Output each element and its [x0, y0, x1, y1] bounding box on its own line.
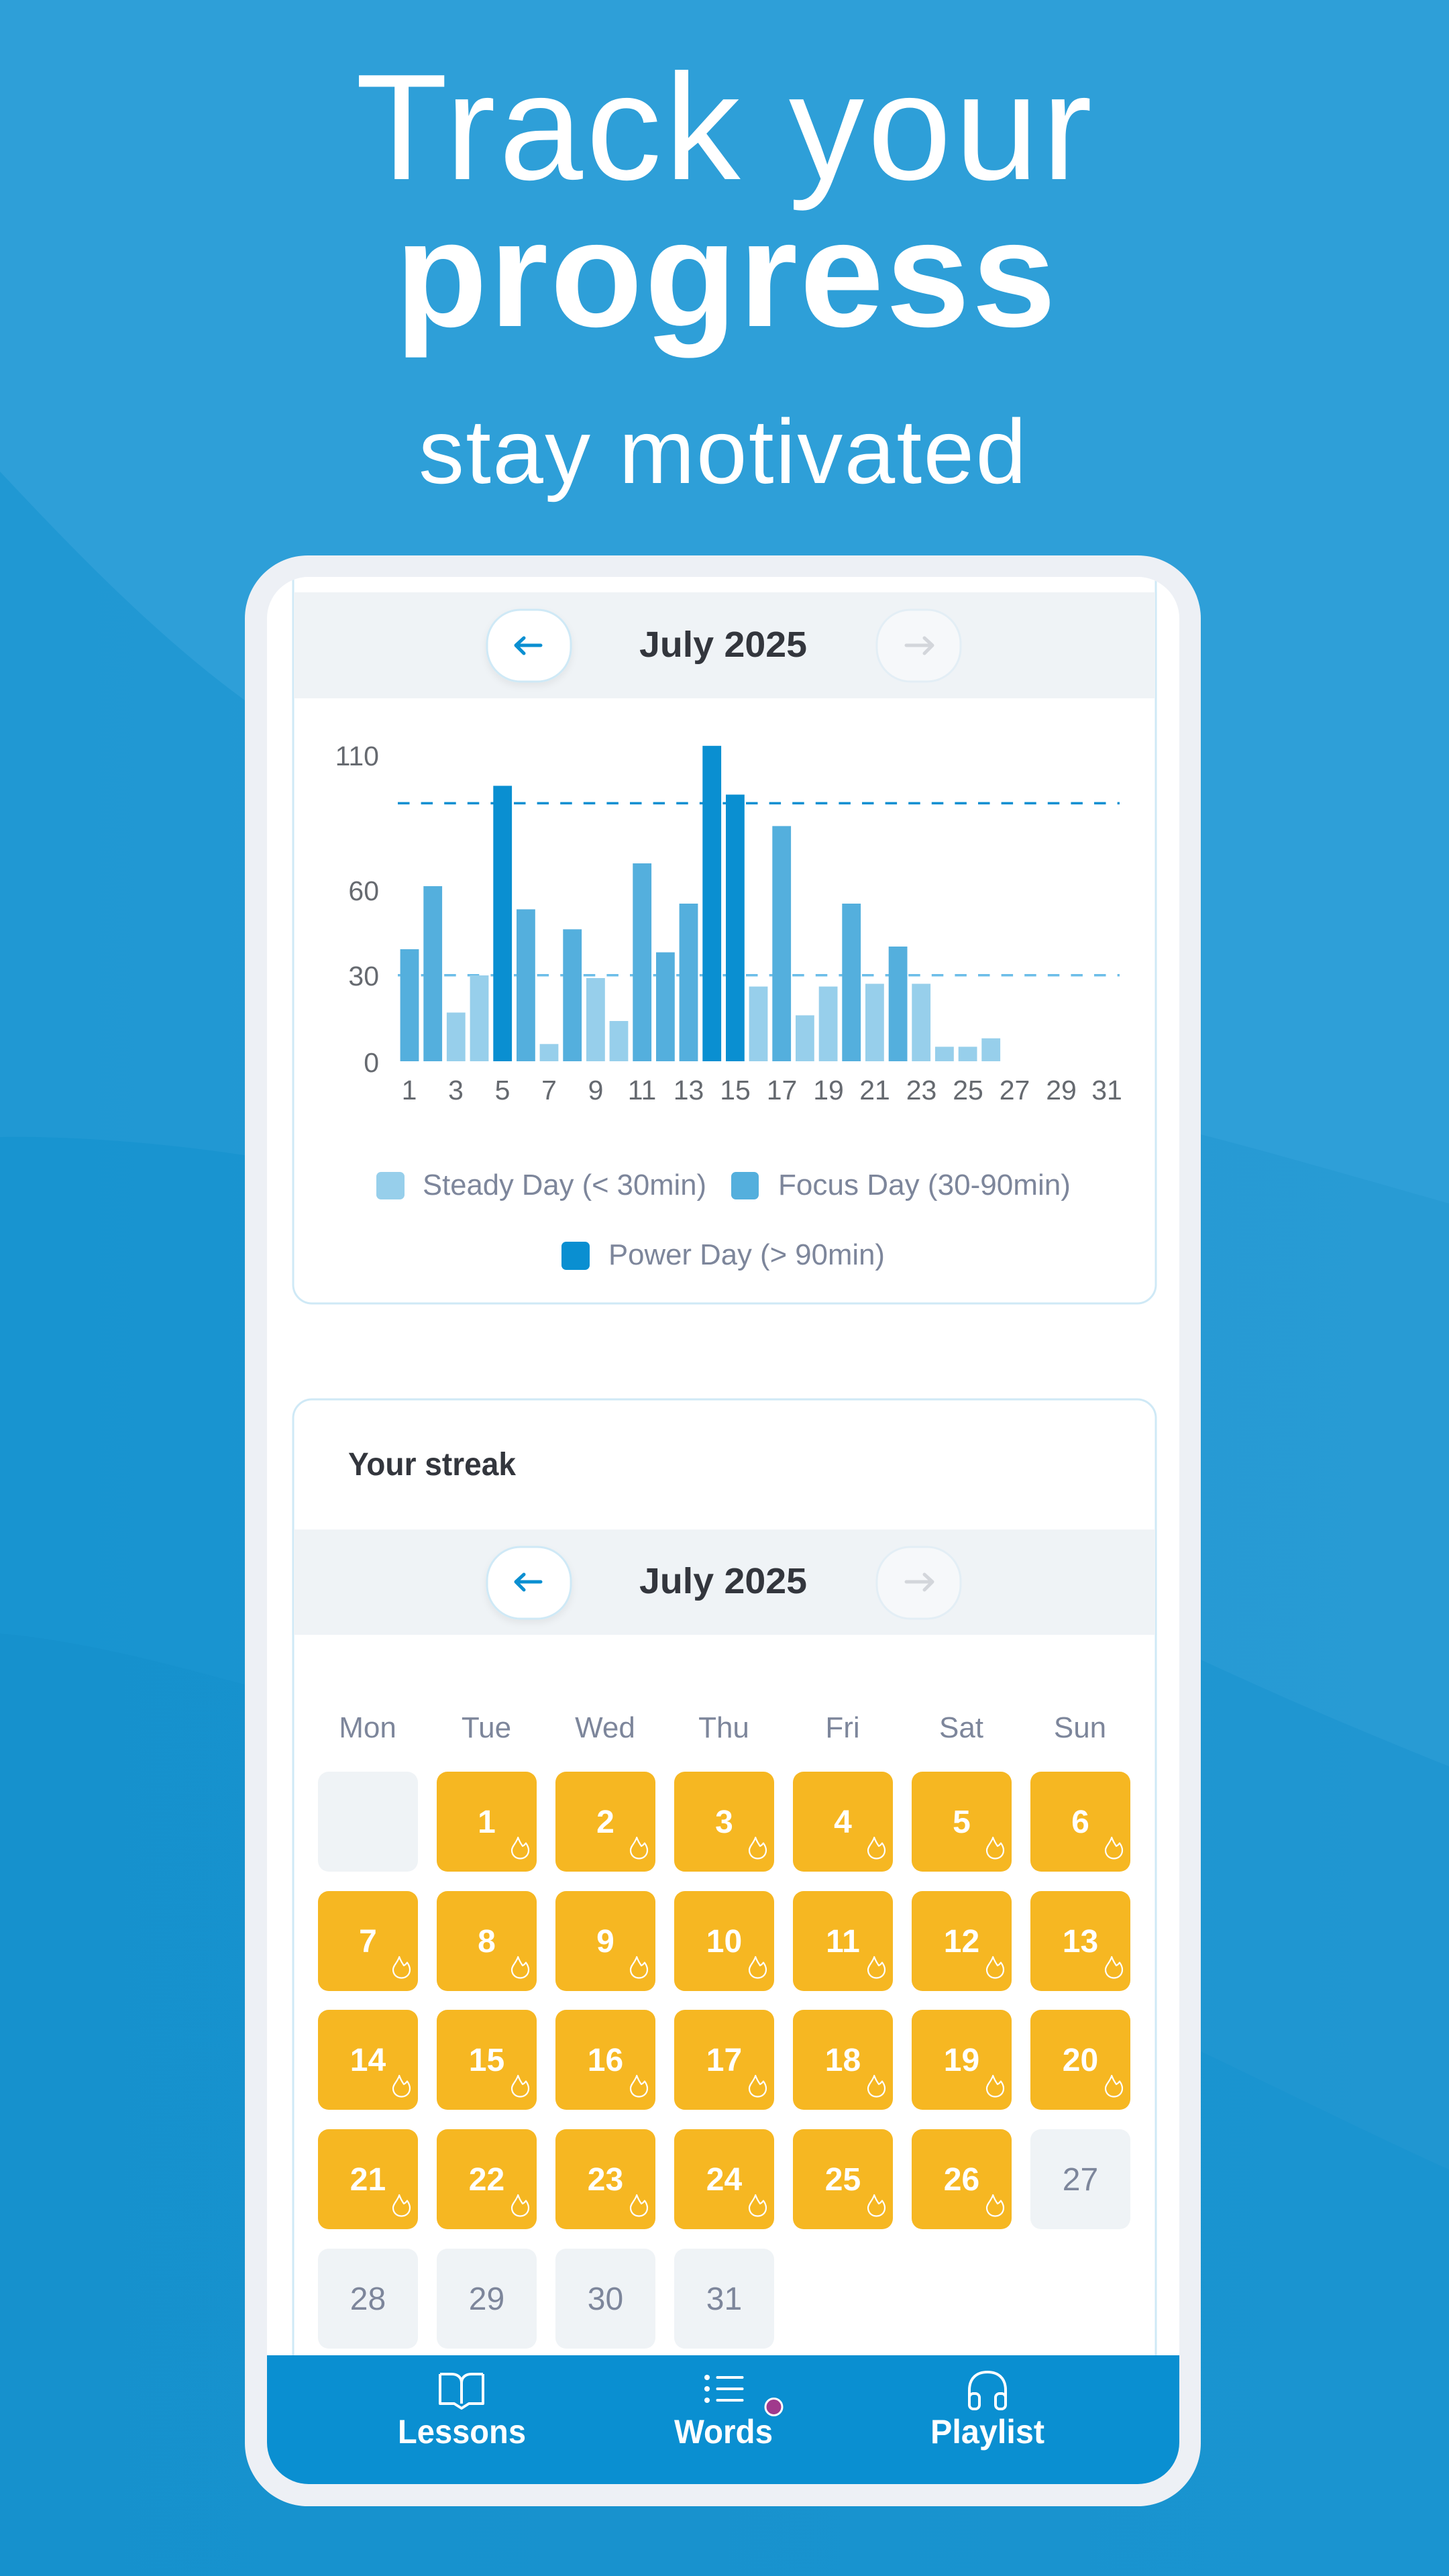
icon: headphones — [969, 2372, 1006, 2409]
x axis labels: 19 — [813, 1075, 844, 1106]
day 22: 22 — [469, 2162, 504, 2198]
button: next month — [877, 1547, 961, 1619]
day 24 — [674, 2129, 774, 2229]
day 3: 3 — [715, 1805, 733, 1840]
x axis labels: 7 — [541, 1075, 557, 1106]
icon: list — [704, 2375, 743, 2403]
panel: streak card — [293, 1399, 1156, 2406]
x axis labels: 1 — [402, 1075, 417, 1106]
day 4 — [793, 1772, 893, 1872]
y axis labels — [335, 741, 379, 1078]
day 20 — [1030, 2010, 1130, 2110]
calendar grid — [318, 1772, 1130, 2349]
day 9 — [555, 1891, 655, 1991]
nav item: Lessons — [398, 2374, 526, 2451]
x axis labels: 15 — [720, 1075, 751, 1106]
day 21 — [318, 2129, 418, 2229]
x axis labels: 5 — [495, 1075, 510, 1106]
day 30 — [555, 2249, 655, 2349]
icon: open book — [440, 2374, 483, 2408]
x axis labels — [404, 1080, 1121, 1100]
day 4: 4 — [834, 1805, 852, 1840]
day 31 — [674, 2249, 774, 2349]
x axis labels: 11 — [628, 1075, 656, 1106]
button: previous month — [487, 610, 571, 682]
weekday headers: Sun — [1054, 1711, 1106, 1744]
day 9: 9 — [596, 1924, 614, 1960]
x axis labels: 31 — [1091, 1075, 1122, 1106]
heading: July 2025: July 2025 — [639, 1561, 807, 1601]
day 15: 15 — [469, 2043, 504, 2078]
day 23 — [555, 2129, 655, 2229]
nav item: Playlist — [930, 2372, 1044, 2451]
day 25 — [793, 2129, 893, 2229]
weekday headers: Tue — [462, 1711, 511, 1744]
day 30: 30 — [588, 2282, 623, 2317]
day 26 — [912, 2129, 1012, 2229]
title: progress: progress — [395, 189, 1056, 358]
day 29 — [437, 2249, 537, 2349]
x axis labels: 29 — [1046, 1075, 1077, 1106]
x axis labels: 21 — [859, 1075, 890, 1106]
title: Track your: Track your — [356, 42, 1092, 211]
month selector bar: chart — [294, 592, 1155, 698]
day 31: 31 — [706, 2282, 742, 2317]
panel: daily minutes chart card — [293, 550, 1156, 1303]
day 16: 16 — [588, 2043, 623, 2078]
legend: steady day: Steady Day (< 30min) — [423, 1169, 706, 1201]
day 8 — [437, 1891, 537, 1991]
day 18: 18 — [825, 2043, 861, 2078]
y axis labels: 110 — [335, 741, 379, 771]
day 24: 24 — [706, 2162, 742, 2198]
heading: July 2025: July 2025 — [639, 625, 807, 665]
day 18 — [793, 2010, 893, 2110]
day 14 — [318, 2010, 418, 2110]
day 17 — [674, 2010, 774, 2110]
day 20: 20 — [1063, 2043, 1098, 2078]
phone screen content — [267, 550, 1179, 2484]
weekday headers: Thu — [698, 1711, 749, 1744]
button: previous month — [487, 1547, 571, 1619]
day 23: 23 — [588, 2162, 623, 2198]
x axis labels: 25 — [953, 1075, 983, 1106]
nav item: Playlist: Playlist — [930, 2413, 1044, 2451]
day 16 — [555, 2010, 655, 2110]
day 12: 12 — [944, 1924, 979, 1960]
day 12 — [912, 1891, 1012, 1991]
day 13 — [1030, 1891, 1130, 1991]
legend: power day: Power Day (> 90min) — [608, 1238, 885, 1271]
day 21: 21 — [350, 2162, 386, 2198]
x axis labels: 3 — [448, 1075, 464, 1106]
day 19: 19 — [944, 2043, 979, 2078]
day 5 — [912, 1772, 1012, 1872]
x axis labels: 17 — [767, 1075, 797, 1106]
y axis labels: 60 — [348, 875, 379, 906]
day 2: 2 — [596, 1805, 614, 1840]
day 10 — [674, 1891, 774, 1991]
day 27: 27 — [1063, 2162, 1098, 2198]
bottom navigation bar — [267, 2355, 1179, 2484]
x axis labels: 23 — [906, 1075, 936, 1106]
subtitle: stay motivated: stay motivated — [419, 400, 1026, 502]
day 6: 6 — [1071, 1805, 1089, 1840]
day 19 — [912, 2010, 1012, 2110]
day 14: 14 — [350, 2043, 386, 2078]
phone frame — [245, 550, 1201, 2506]
day 25: 25 — [825, 2162, 861, 2198]
day 27 — [1030, 2129, 1130, 2229]
day 29: 29 — [469, 2282, 504, 2317]
heading: Your streak: Your streak — [348, 1447, 516, 1483]
day 6 — [1030, 1772, 1130, 1872]
day 11: 11 — [826, 1924, 860, 1960]
day 8: 8 — [478, 1924, 496, 1960]
notification dot — [765, 2399, 782, 2415]
legend: focus day: Focus Day (30-90min) — [778, 1169, 1071, 1201]
nav item: Lessons: Lessons — [398, 2413, 526, 2451]
button: next month — [877, 610, 961, 682]
day 22 — [437, 2129, 537, 2229]
day 13: 13 — [1063, 1924, 1098, 1960]
empty cell — [318, 1772, 418, 1872]
day 28: 28 — [350, 2282, 386, 2317]
day 10: 10 — [706, 1924, 742, 1960]
day 5: 5 — [953, 1805, 971, 1840]
y axis labels: 0 — [364, 1047, 379, 1078]
day 11 — [793, 1891, 893, 1991]
day 7: 7 — [359, 1924, 377, 1960]
bar chart — [335, 741, 1122, 1106]
day 3 — [674, 1772, 774, 1872]
day 26: 26 — [944, 2162, 979, 2198]
day 28 — [318, 2249, 418, 2349]
weekday headers: Sat — [939, 1711, 983, 1744]
x axis labels: 13 — [674, 1075, 704, 1106]
nav item: Words: Words — [674, 2413, 773, 2451]
weekday headers: Fri — [825, 1711, 860, 1744]
x axis labels: 27 — [1000, 1075, 1030, 1106]
day 1: 1 — [478, 1805, 496, 1840]
weekday headers: Mon — [339, 1711, 396, 1744]
month selector bar: calendar — [294, 1529, 1155, 1635]
weekday headers — [341, 1716, 1104, 1737]
legend — [376, 1169, 1071, 1271]
day 1 — [437, 1772, 537, 1872]
nav item: Words — [674, 2375, 782, 2451]
bars — [400, 746, 1000, 1061]
weekday headers: Wed — [575, 1711, 635, 1744]
day 2 — [555, 1772, 655, 1872]
day 15 — [437, 2010, 537, 2110]
y axis labels: 30 — [348, 961, 379, 991]
x axis labels: 9 — [588, 1075, 603, 1106]
day 7 — [318, 1891, 418, 1991]
day 17: 17 — [706, 2043, 742, 2078]
